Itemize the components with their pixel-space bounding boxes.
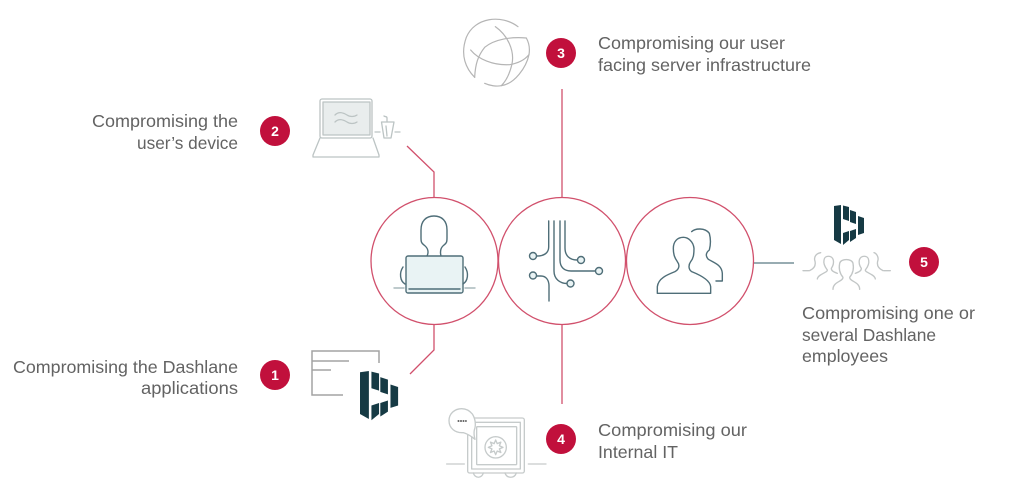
badge 3: 3 [557, 45, 565, 61]
label 2 [92, 111, 238, 153]
label 3: Compromising our user [598, 33, 785, 53]
label 4: Internal IT [598, 442, 678, 462]
label 5: several Dashlane [802, 325, 936, 345]
badge 1 [260, 360, 290, 390]
icon: person at laptop [394, 216, 475, 293]
label 5: employees [802, 346, 888, 366]
badge 3 [546, 38, 576, 68]
label 3 [598, 33, 811, 75]
icon: Dashlane logo [834, 205, 864, 245]
label 4 [598, 420, 747, 462]
badge 5 [909, 247, 939, 277]
icon: globe [464, 19, 529, 86]
badge 4: 4 [557, 431, 565, 447]
icon: browser window with logo [312, 351, 398, 420]
label 5 [802, 303, 975, 366]
badge 2 [260, 116, 290, 146]
label 3: facing server infrastructure [598, 55, 811, 75]
badge 4 [546, 424, 576, 454]
badge 5: 5 [920, 254, 928, 270]
label 5: Compromising one or [802, 303, 975, 323]
icon: circuit [530, 221, 602, 301]
icon: laptop and drink [313, 99, 400, 157]
badge 1: 1 [271, 367, 279, 383]
label 4: Compromising our [598, 420, 747, 440]
label 2: user’s device [137, 133, 238, 153]
label 2: Compromising the [92, 111, 238, 131]
logo: Dashlane [360, 371, 398, 420]
label 1: applications [141, 378, 238, 398]
panel: employees circle [626, 198, 754, 324]
icon: two people [657, 229, 722, 293]
label 1 [13, 357, 238, 398]
connector lines [407, 89, 794, 404]
panel: circuit circle [498, 198, 626, 324]
badge 2: 2 [271, 123, 279, 139]
icon: safe with speech bubble [447, 409, 546, 477]
icon: employee group [803, 253, 890, 289]
label 1: Compromising the Dashlane [13, 357, 238, 377]
panel: user circle [371, 198, 498, 324]
